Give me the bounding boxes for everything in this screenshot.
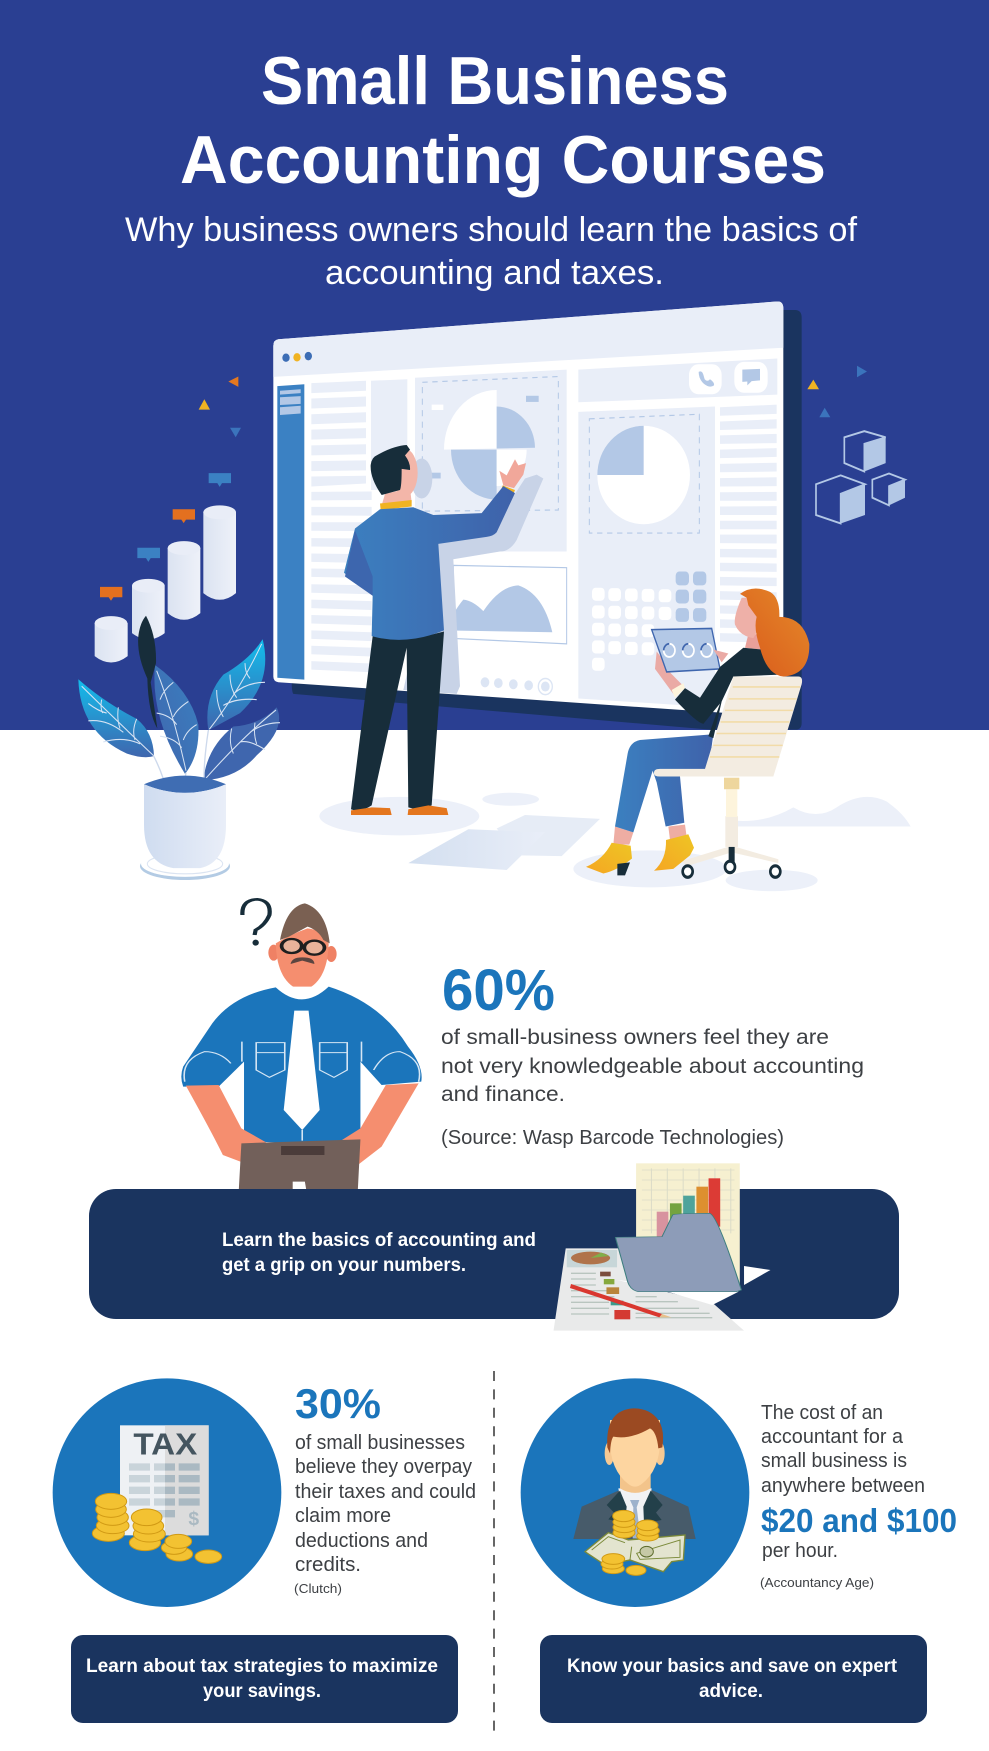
stat: 30 percent: claim more [295,1505,391,1527]
stat: 30 percent: deductions and [295,1530,428,1552]
banner: expert advice [540,1635,927,1723]
stat: accountant cost: The cost of an [761,1402,883,1424]
illustration: standing man [344,445,543,815]
illustration: seated woman on chair [586,589,809,877]
stat: 30 percent: believe they overpay [295,1456,472,1478]
banner text: get a grip on your numbers. [222,1255,466,1276]
banner: tax strategies: Learn about tax strategies to maximize [86,1656,438,1677]
icon circle: tax document and coins: TAX [133,1427,198,1461]
stat: 30 percent: 30% [295,1380,381,1427]
stat: accountant cost: per hour. [762,1540,838,1562]
stat: 30 percent: (Clutch) [294,1582,342,1596]
stat: accountant cost: anywhere between [761,1475,925,1497]
stat: 60 percent: not very knowledgeable about accounting [441,1055,864,1078]
icon: cylinder bar chart with callouts [95,377,241,663]
title: Small Business [261,43,729,119]
title [180,43,826,198]
banner: tax strategies: your savings. [203,1681,321,1702]
stat: accountant cost: (Accountancy Age) [760,1575,874,1590]
stat: 30 percent: credits. [295,1554,361,1576]
banner: expert advice: advice. [699,1681,763,1702]
stat: 30 percent [294,1380,476,1596]
stat: 30 percent: of small businesses [295,1432,465,1454]
stat: 60 percent: of small-business owners feel they are [441,1026,829,1049]
banner text: Learn the basics of accounting and [222,1230,536,1251]
stat: accountant cost: small business is [761,1450,907,1472]
stat: accountant cost: $20 and $100 [761,1502,957,1539]
icon circle: accountant with money [521,1378,749,1607]
subtitle: accounting and taxes. [325,254,664,292]
banner: expert advice: Know your basics and save on expert [567,1656,898,1677]
stat: accountant cost: accountant for a [761,1426,904,1448]
banner: tax strategies [71,1635,458,1723]
icon circle: tax document and coins [53,1378,281,1607]
title: Accounting Courses [180,122,826,198]
stat: 60 percent: (Source: Wasp Barcode Technologies) [441,1127,784,1149]
icon: confused man with question mark [181,899,422,1191]
header background [0,0,989,730]
icon circle: tax document and coins: $ [188,1509,199,1530]
stat: 60 percent [441,958,864,1149]
icon: cubes and triangles [807,366,905,523]
stat: accountant cost [760,1402,957,1590]
stat: 60 percent: and finance. [441,1083,565,1106]
illustration: dashboard screen [273,301,802,730]
floor shadows and papers [319,793,911,891]
banner: learn the basics [89,1189,899,1319]
banner text [222,1230,536,1276]
stat: 60 percent: 60% [442,958,555,1023]
icon: potted plant [78,616,280,880]
subtitle: Why business owners should learn the basics of [125,211,858,249]
subtitle [125,211,858,292]
stat: 30 percent: their taxes and could [295,1481,476,1503]
icon: folder with charts and pencil [554,1163,770,1331]
